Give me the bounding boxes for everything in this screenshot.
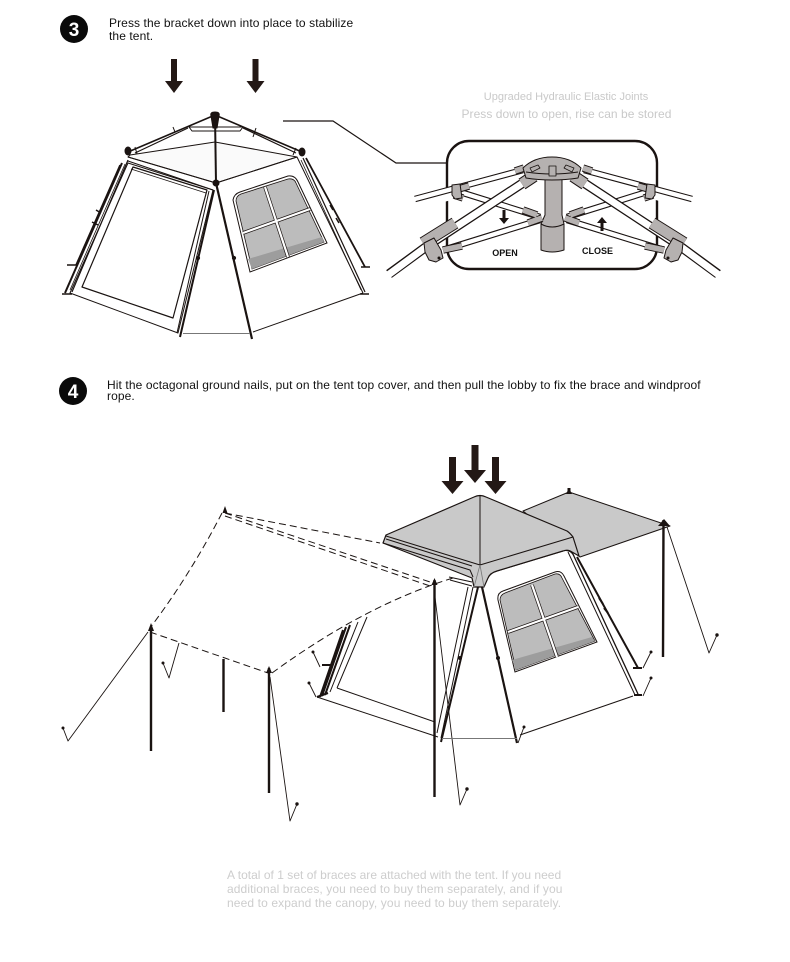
step 3 number badge: 3 xyxy=(69,20,79,41)
long arms xyxy=(389,177,718,274)
awning canopy, dashed outline, poles and ropes xyxy=(62,488,719,821)
step 4 tent body xyxy=(317,551,642,743)
stub of side door top xyxy=(449,577,472,586)
step 3 number badge xyxy=(60,15,88,43)
step 4 instruction text: rope. xyxy=(107,389,135,403)
front poles xyxy=(437,587,473,738)
step 4 instruction text xyxy=(107,378,701,403)
right wall poles xyxy=(568,552,635,695)
close arrow xyxy=(597,217,607,231)
footnote text: additional braces, you need to buy them separately, and if you xyxy=(227,882,563,896)
left door edge poles xyxy=(320,625,350,697)
joint detail illustration xyxy=(386,141,721,276)
tent top cover xyxy=(383,495,579,587)
step 3 tent illustration xyxy=(62,112,370,339)
back canopy xyxy=(523,492,670,557)
guy ropes xyxy=(63,527,717,821)
bottom edges xyxy=(183,332,250,334)
close label: CLOSE xyxy=(582,246,613,256)
open arrow xyxy=(499,210,509,224)
step 4 instruction text: Hit the octagonal ground nails, put on the tent top cover, and then pull the lobby to fix the brace and windproof xyxy=(107,378,701,392)
footnote text: A total of 1 set of braces are attached with the tent. If you need xyxy=(227,868,561,882)
door bottom xyxy=(317,688,438,737)
footnote text xyxy=(227,868,563,910)
dashed front awning xyxy=(150,513,453,673)
front poles xyxy=(180,190,214,337)
white masks breaking the frame xyxy=(400,191,706,266)
step 3 tent window xyxy=(233,176,327,272)
step 4 number badge xyxy=(59,377,87,405)
left side poles xyxy=(65,163,122,293)
joint caption: Upgraded Hydraulic Elastic Joints xyxy=(484,91,649,103)
step 4 down arrows xyxy=(442,445,506,494)
callout leader line xyxy=(283,121,446,163)
sleeves xyxy=(443,168,664,250)
open label: OPEN xyxy=(492,248,518,258)
joint caption xyxy=(461,91,672,121)
awning poles xyxy=(151,520,664,797)
column xyxy=(541,178,564,252)
step 4 tent window xyxy=(498,572,597,672)
step 3 instruction text xyxy=(109,16,354,43)
step 4 number badge: 4 xyxy=(68,382,79,403)
right side poles xyxy=(297,157,363,293)
door xyxy=(70,163,213,333)
step 3 instruction text: Press the bracket down into place to stabilize xyxy=(109,16,354,30)
step 3 down arrows xyxy=(165,59,264,93)
joint caption: Press down to open, rise can be stored xyxy=(461,107,672,121)
dome xyxy=(523,157,581,180)
footnote text: need to expand the canopy, you need to buy them separately. xyxy=(227,896,561,910)
step 3 instruction text: the tent. xyxy=(109,29,153,43)
upper arms xyxy=(415,170,692,199)
lower struts xyxy=(443,192,664,250)
